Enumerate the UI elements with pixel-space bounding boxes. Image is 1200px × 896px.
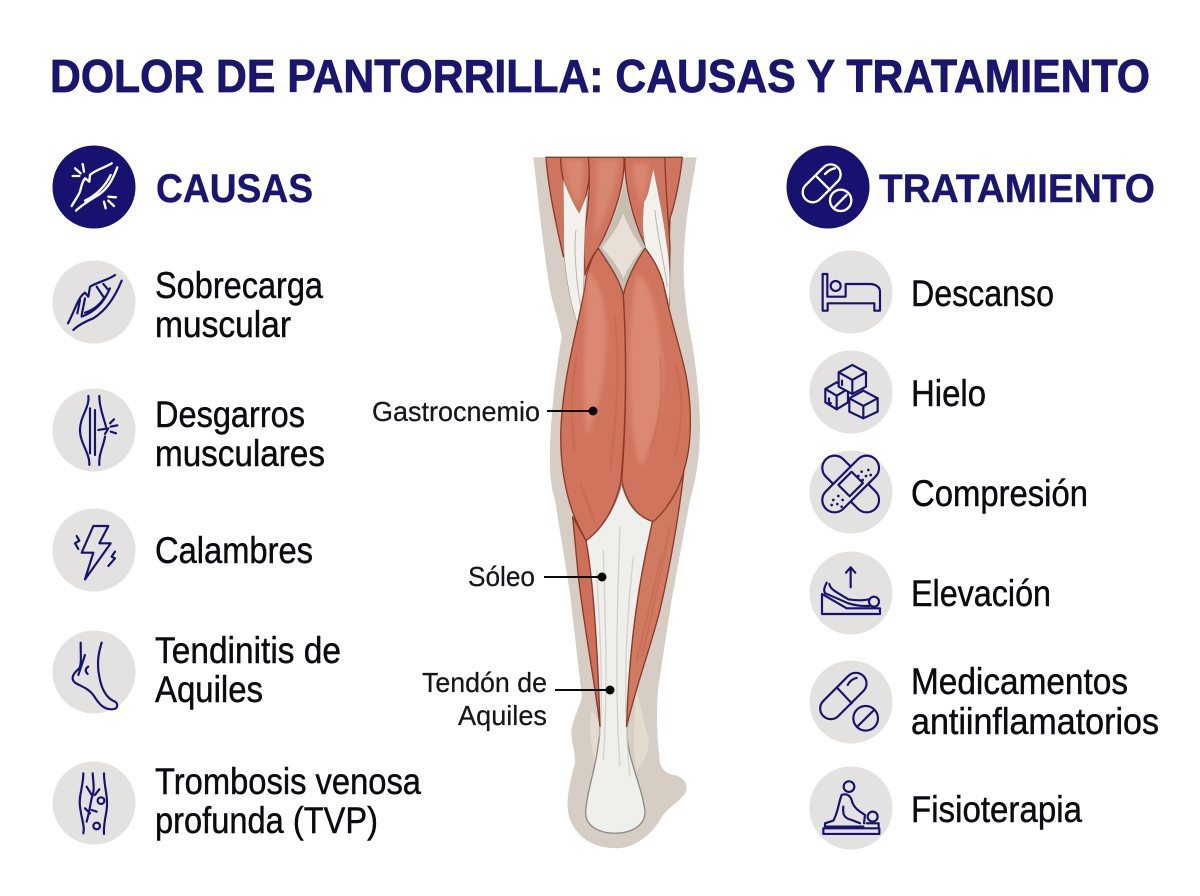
cause: calambres: Calambres: [155, 530, 313, 571]
causas header: [52, 146, 313, 228]
cause: sobrecarga muscular: [52, 260, 323, 345]
cause: trombosis venosa profunda: [52, 761, 421, 844]
hamstring outer strips: [546, 157, 591, 257]
treatment: descanso: Descanso: [911, 273, 1054, 314]
callout: tendon de aquiles: Aquiles: [458, 700, 547, 731]
treatment: compresion: Compresión: [911, 473, 1088, 514]
callout: gastrocnemio: Gastrocnemio: [372, 396, 540, 427]
treatment: elevacion: [810, 552, 1051, 634]
treatment: hielo: Hielo: [911, 373, 986, 414]
muscle highlights: [584, 270, 663, 467]
hamstring inner muscles: [583, 157, 624, 275]
illustration: calf anatomy: [533, 157, 700, 848]
treatment: elevacion: Elevación: [911, 573, 1051, 614]
panel: tratamiento: [786, 146, 1159, 850]
cause: desgarros musculares: [52, 388, 325, 474]
heading: causas: CAUSAS: [156, 167, 313, 211]
icon: torn muscle header: [52, 146, 136, 228]
cause: sobrecarga muscular: Sobrecarga: [155, 265, 323, 306]
achilles tendon: [586, 483, 653, 833]
treatment: medicamentos antiinflamatorios: antiinflamatorios: [911, 701, 1159, 742]
treatment: descanso: [810, 250, 1054, 334]
heading: tratamiento: TRATAMIENTO: [879, 167, 1155, 211]
soleus left: [573, 517, 600, 727]
tratamiento header: [786, 146, 1155, 228]
treatment: compresion: [810, 450, 1088, 534]
treatment: hielo: [810, 350, 986, 434]
icon: pills header: [786, 146, 870, 228]
cause: desgarros musculares: musculares: [155, 433, 325, 474]
cause: tendinitis de aquiles: Aquiles: [155, 669, 263, 710]
callout: soleo: Sóleo: [468, 561, 535, 592]
soleus right: [627, 470, 684, 727]
treatment: medicamentos antiinflamatorios: Medicamentos: [911, 661, 1128, 702]
hamstring tendons: [563, 180, 587, 327]
treatment: fisioterapia: [810, 766, 1082, 850]
cause: desgarros musculares: Desgarros: [155, 394, 305, 435]
heel fat pad: [590, 687, 649, 770]
cause: sobrecarga muscular: muscular: [155, 304, 291, 345]
callout: tendon de aquiles: [422, 667, 614, 731]
cause: tendinitis de aquiles: [52, 630, 341, 714]
cause: calambres: [52, 508, 313, 592]
callout: tendon de aquiles: Tendón de: [422, 667, 547, 698]
callout: soleo: [468, 561, 606, 592]
popliteal fossa: [598, 182, 646, 295]
cause: tendinitis de aquiles: Tendinitis de: [155, 630, 341, 671]
cause: trombosis venosa profunda: profunda (TVP): [155, 800, 378, 841]
gastrocnemius right head: [622, 248, 690, 522]
leg silhouette: [533, 157, 700, 848]
treatment: medicamentos antiinflamatorios: [810, 660, 1159, 744]
treatment: fisioterapia: Fisioterapia: [911, 789, 1082, 830]
panel: causas: [52, 146, 421, 844]
cause: trombosis venosa profunda: Trombosis venosa: [155, 761, 421, 802]
gastrocnemius left head: [561, 248, 626, 541]
